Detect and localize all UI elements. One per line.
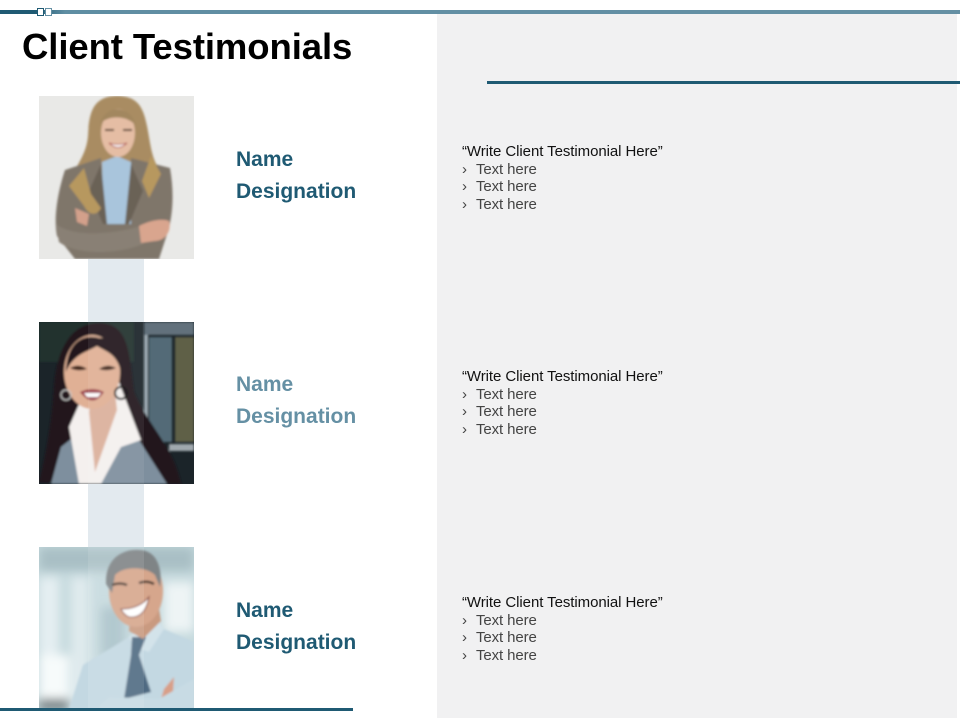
testimonial text 2 [462,368,663,438]
testimonial text 1: › [462,161,467,178]
footer rule [0,708,353,711]
testimonial text 2: › [462,386,467,403]
testimonial text 1: Text here [476,161,537,178]
testimonial text 3 [462,594,663,664]
name and designation 1: Name [236,148,293,171]
name and designation 3: Designation [236,631,356,654]
vertical connector band [88,259,144,547]
testimonial text 1 [462,143,663,213]
grey testimonial panel [437,14,957,718]
portrait: smiling man with tie [39,547,194,708]
testimonial text 3: Text here [476,629,537,646]
testimonial text 2: Text here [476,386,537,403]
top accent bar [0,10,960,14]
name and designation 2: Name [236,373,293,396]
top bar square markers [37,8,52,16]
testimonial text 2: › [462,403,467,420]
title: Client Testimonials [22,26,352,67]
name and designation 2: Designation [236,405,356,428]
testimonial text 3: › [462,612,467,629]
testimonial text 3: Text here [476,612,537,629]
header rule [487,81,960,84]
name and designation 1: Designation [236,180,356,203]
testimonial text 1: › [462,196,467,213]
testimonial text 3: “Write Client Testimonial Here” [462,594,663,611]
testimonial text 2: “Write Client Testimonial Here” [462,368,663,385]
testimonial text 1: Text here [476,196,537,213]
testimonial text 3: Text here [476,647,537,664]
testimonial text 2: Text here [476,421,537,438]
testimonial text 3: › [462,629,467,646]
name and designation 2 [236,373,356,428]
testimonial text 2: › [462,421,467,438]
testimonial text 1: › [462,178,467,195]
testimonial text 1: Text here [476,178,537,195]
portrait: woman with long dark hair [39,322,194,484]
name and designation 3 [236,599,356,654]
testimonial text 1: “Write Client Testimonial Here” [462,143,663,160]
testimonial text 2: Text here [476,403,537,420]
testimonial text 3: › [462,647,467,664]
name and designation 3: Name [236,599,293,622]
name and designation 1 [236,148,356,203]
portrait: woman in grey blazer [39,96,194,259]
